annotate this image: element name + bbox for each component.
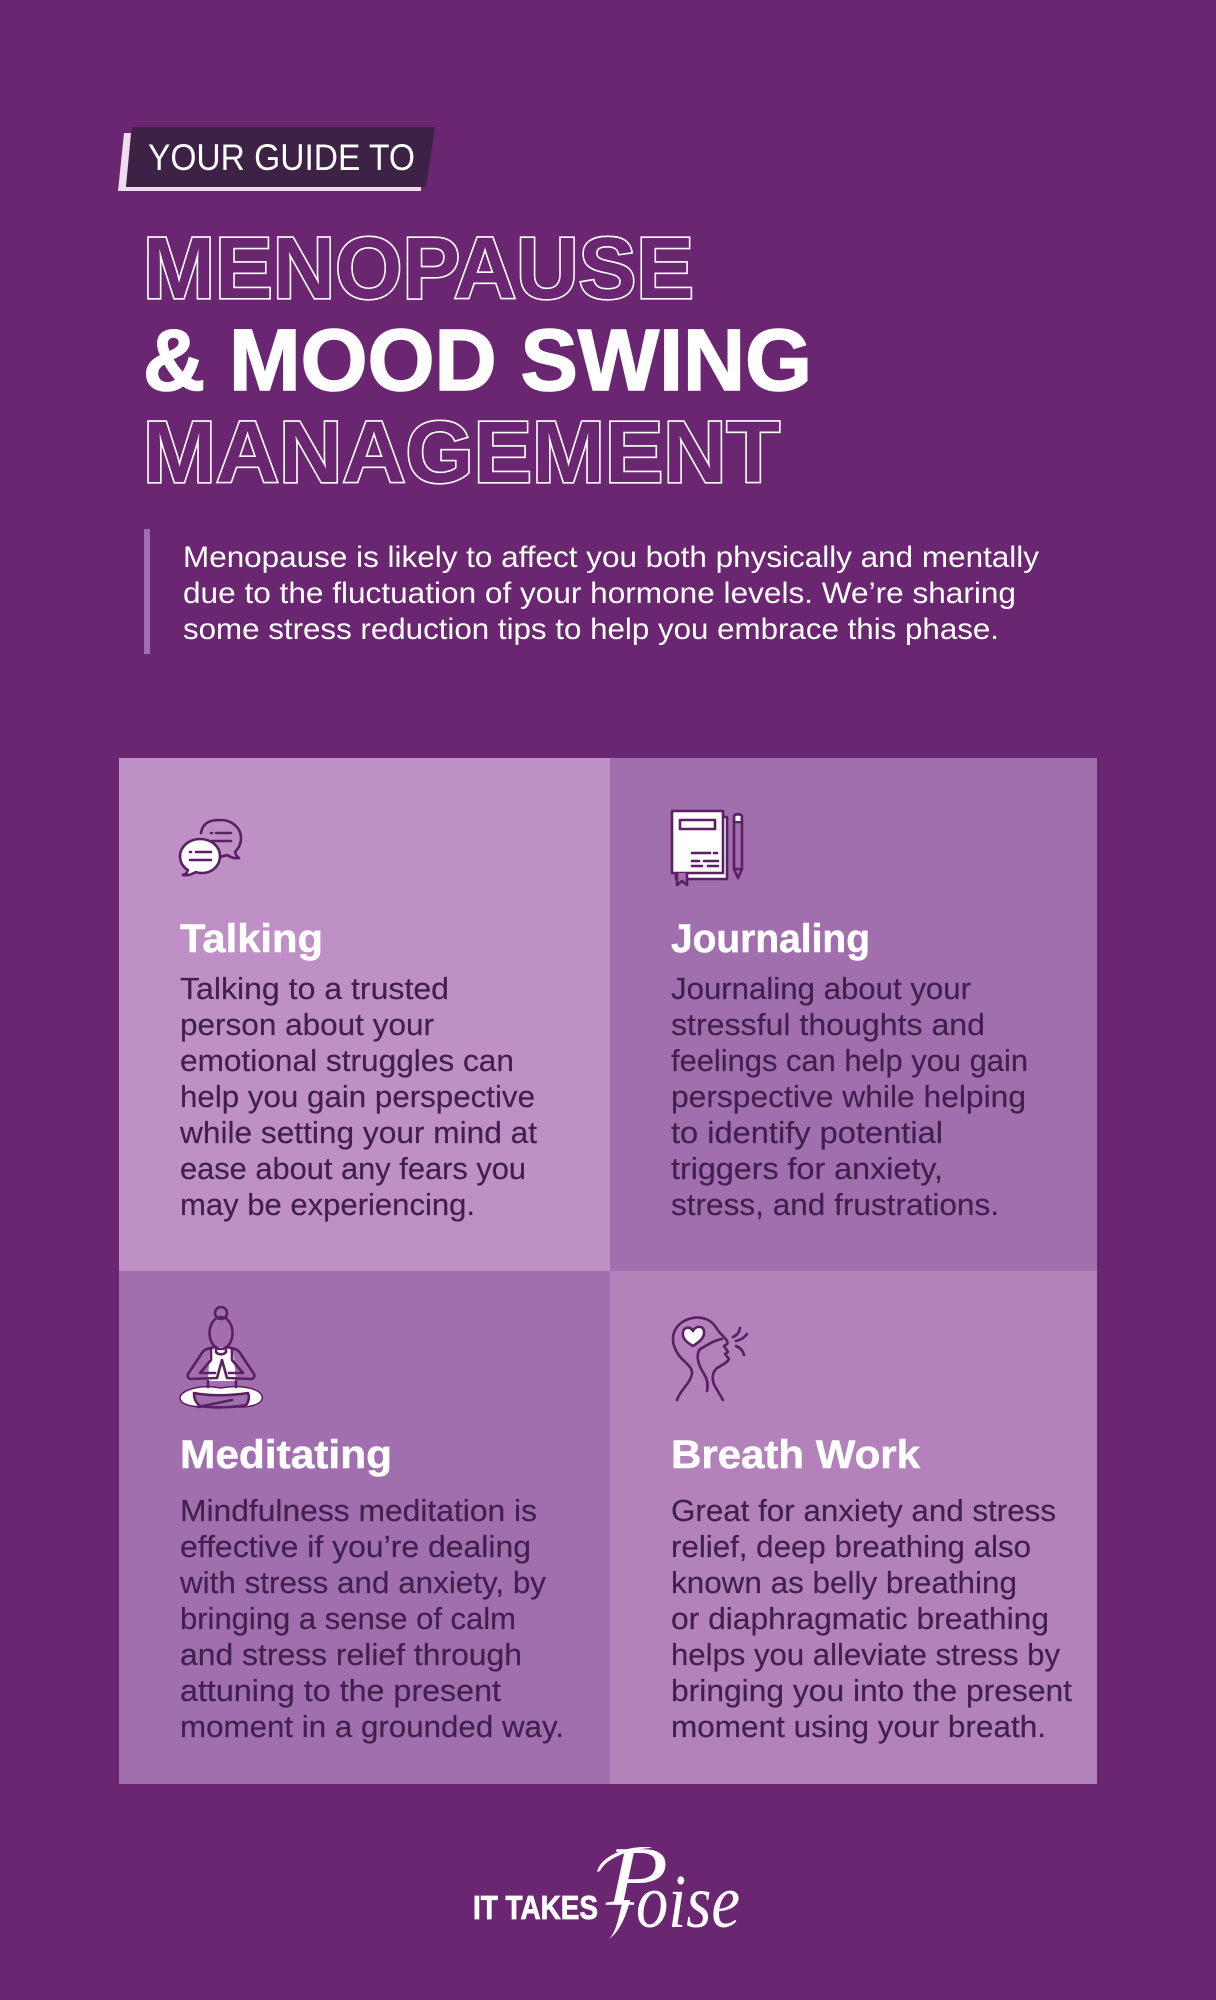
intro text: Menopause is likely to affect you both physically and mentally [183, 541, 1039, 574]
body: meditating: and stress relief through [180, 1637, 522, 1672]
badge: your guide to: YOUR GUIDE TO [148, 137, 415, 178]
body: journaling: stressful thoughts and [671, 1007, 985, 1042]
intro text: some stress reduction tips to help you embrace this phase. [183, 613, 999, 646]
body: breath work [671, 1493, 1072, 1744]
body: breath work: Great for anxiety and stress [671, 1493, 1056, 1528]
body: journaling: Journaling about your [671, 971, 971, 1006]
panel: talking [119, 758, 610, 1271]
icon: head with heart and breath [673, 1318, 747, 1400]
icon: notebook and pencil [672, 811, 742, 885]
intro text [183, 541, 1039, 646]
logo: it takes poise: P [605, 1830, 668, 1924]
body: talking: help you gain perspective [180, 1079, 535, 1114]
logo: it takes poise: oise [636, 1860, 740, 1944]
body: meditating: Mindfulness meditation is [180, 1493, 537, 1528]
body: meditating: with stress and anxiety, by [179, 1565, 546, 1600]
logo: it takes poise: IT TAKES [473, 1889, 598, 1926]
body: journaling: perspective while helping [671, 1079, 1026, 1114]
body: talking: may be experiencing. [180, 1187, 475, 1222]
body: journaling: feelings can help you gain [671, 1043, 1028, 1078]
body: talking: while setting your mind at [179, 1115, 537, 1150]
heading: meditating: Meditating [180, 1433, 392, 1477]
heading: journaling: Journaling [671, 917, 870, 961]
body: meditating [179, 1493, 564, 1744]
body: talking: Talking to a trusted [180, 971, 449, 1006]
title [143, 220, 812, 501]
body: breath work: or diaphragmatic breathing [671, 1601, 1049, 1636]
body: meditating: bringing a sense of calm [180, 1601, 516, 1636]
intro accent bar [144, 529, 150, 654]
body: meditating: attuning to the present [180, 1673, 501, 1708]
panel: breath work [610, 1271, 1097, 1784]
body: breath work: known as belly breathing [671, 1565, 1017, 1600]
title: & MOOD SWING [143, 312, 812, 409]
body: breath work: helps you alleviate stress by [671, 1637, 1060, 1672]
title: MANAGEMENT [143, 404, 780, 501]
body: journaling: to identify potential [671, 1115, 943, 1150]
body: meditating: effective if you’re dealing [180, 1529, 531, 1564]
body: breath work: bringing you into the present [671, 1673, 1072, 1708]
body: talking: person about your [180, 1007, 434, 1042]
heading: talking: Talking [180, 917, 323, 961]
body: journaling: triggers for anxiety, [671, 1151, 943, 1186]
body: breath work: moment using your breath. [671, 1709, 1046, 1744]
body: talking [179, 971, 537, 1222]
icon: meditating figure [180, 1307, 262, 1407]
body: talking: ease about any fears you [180, 1151, 526, 1186]
body: journaling: stress, and frustrations. [671, 1187, 999, 1222]
badge: your guide to [118, 127, 435, 191]
logo: it takes poise [473, 1830, 740, 1944]
intro text: due to the fluctuation of your hormone levels. We’re sharing [183, 577, 1016, 610]
panel: journaling [610, 758, 1097, 1271]
heading: breath work: Breath Work [671, 1433, 921, 1477]
panel: meditating [119, 1271, 610, 1784]
icon: speech bubbles [180, 820, 241, 875]
body: meditating: moment in a grounded way. [180, 1709, 564, 1744]
body: talking: emotional struggles can [180, 1043, 514, 1078]
body: breath work: relief, deep breathing also [671, 1529, 1031, 1564]
body: journaling [671, 971, 1028, 1222]
title: MENOPAUSE [143, 220, 694, 317]
